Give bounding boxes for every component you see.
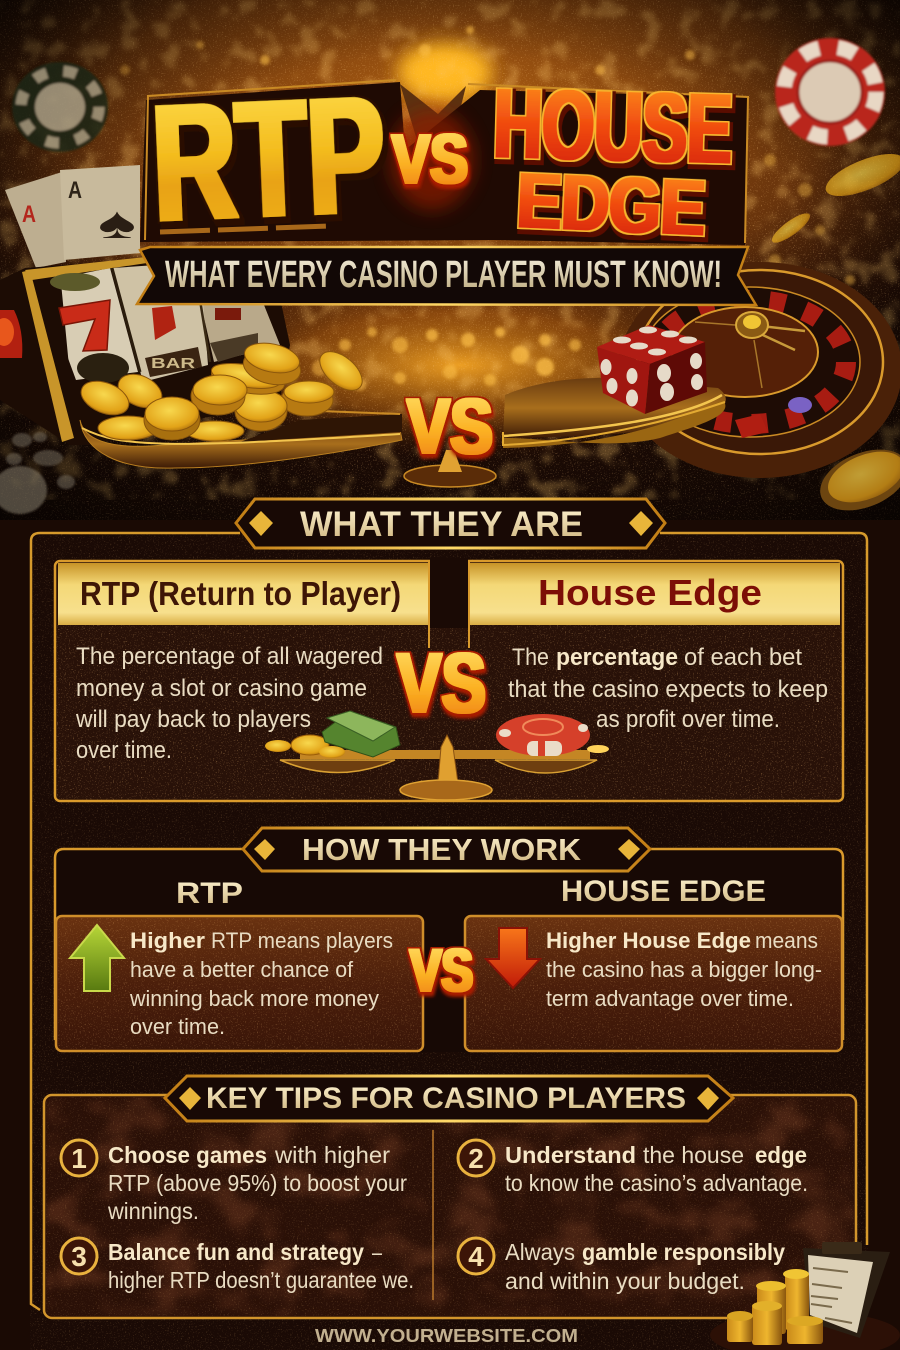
- tip 4: 4: [468, 1241, 484, 1272]
- footer url: WWW.YOURWEBSITE.COM: [315, 1326, 578, 1346]
- gold coins floating: [768, 145, 900, 522]
- panel: key tips: [44, 1095, 856, 1318]
- chip: red poker chip top right: [775, 38, 885, 146]
- House Edge box: [465, 916, 842, 1051]
- heading: how they work: [243, 828, 650, 871]
- tip 4: gamble responsibly: [582, 1239, 785, 1265]
- RTP header box: [58, 563, 428, 625]
- RTP description: over time.: [76, 737, 172, 764]
- playing cards: ♠: [98, 199, 136, 248]
- illustration: balance tray right: [503, 378, 726, 448]
- title backing plate: [140, 80, 748, 245]
- House Edge header box: [470, 563, 840, 625]
- House Edge header box: House Edge: [538, 572, 762, 613]
- icon: down arrow: [486, 928, 540, 988]
- playing cards: A: [22, 201, 36, 228]
- illustration: scale base under VS: [404, 450, 496, 487]
- tip 2: 2: [468, 1143, 484, 1174]
- RTP sub heading: RTP: [176, 877, 243, 910]
- tip 2: the house: [643, 1142, 744, 1168]
- tip 1: [61, 1140, 407, 1224]
- House Edge work text: Higher House Edge: [546, 928, 751, 953]
- RTP header box: RTP (Return to Player): [80, 575, 401, 612]
- tip 2: Understand: [505, 1142, 636, 1168]
- illustration: clipboard and coin stacks: [710, 1242, 900, 1350]
- House Edge work text: term advantage over time.: [546, 986, 794, 1011]
- tip 3: –: [372, 1239, 382, 1265]
- chip: dark poker chip top left: [12, 62, 108, 152]
- House Edge work text: [546, 928, 822, 1011]
- RTP description: The percentage of all wagered: [76, 643, 383, 670]
- House Edge description: percentage: [556, 644, 678, 671]
- heading: key tips: KEY TIPS FOR CASINO PLAYERS: [206, 1082, 686, 1115]
- RTP description: [75, 643, 383, 764]
- House Edge work text: means: [755, 928, 818, 953]
- RTP work text: over time.: [130, 1014, 225, 1039]
- panel: how they work: [55, 849, 843, 1052]
- illustration: red dice: [597, 325, 707, 414]
- title: vs: VS: [392, 120, 468, 198]
- illustration: balance scale: [265, 711, 609, 800]
- illustration: roulette wheel: [618, 262, 900, 478]
- House Edge description: that the casino expects to keep: [508, 676, 828, 703]
- House Edge description: [508, 644, 828, 733]
- chips bottom left, dim: [0, 432, 75, 514]
- tip 4: [458, 1238, 785, 1294]
- House Edge sub heading: HOUSE EDGE: [561, 875, 766, 908]
- RTP work text: winning back more money: [129, 986, 379, 1011]
- playing cards: A: [68, 177, 82, 204]
- heading: what they are: [236, 499, 665, 548]
- tip 4: and within your budget.: [505, 1268, 745, 1294]
- heading: how they work: HOW THEY WORK: [302, 832, 582, 867]
- title: EDGE: EDGE: [515, 156, 707, 252]
- tip 2: to know the casino’s advantage.: [505, 1170, 808, 1196]
- title: HOUSE: HOUSE: [492, 68, 733, 184]
- tip 2: edge: [755, 1142, 807, 1168]
- playing cards: [5, 165, 140, 268]
- House Edge work text: the casino has a bigger long-: [546, 957, 822, 982]
- tip 3: Balance fun and strategy: [108, 1239, 364, 1265]
- bokeh lights: [120, 26, 855, 391]
- panel: what they are: [55, 558, 843, 801]
- tip 1: RTP (above 95%) to boost your: [108, 1170, 407, 1196]
- RTP work text: have a better chance of: [130, 957, 354, 982]
- RTP work text: [129, 928, 393, 1039]
- illustration: balance tray left: [80, 411, 402, 468]
- tip 3: [61, 1238, 414, 1293]
- tip 1: with higher: [274, 1142, 390, 1168]
- VS badge: VS: [397, 636, 486, 730]
- tip 3: higher RTP doesn’t guarantee we.: [108, 1267, 414, 1293]
- illustration: coin pile: [76, 338, 369, 441]
- icon: up arrow: [70, 925, 124, 991]
- House Edge description: of each bet: [684, 644, 802, 671]
- illustration: slot machine: [0, 250, 290, 445]
- heading: what they are: WHAT THEY ARE: [300, 505, 583, 544]
- tip 1: winnings.: [107, 1198, 199, 1224]
- illustration: slot machine: BAR: [151, 355, 195, 372]
- House Edge description: The: [512, 644, 549, 671]
- RTP box: [56, 916, 423, 1051]
- VS badge: VS: [410, 937, 473, 1004]
- tip 2: [458, 1140, 808, 1196]
- RTP description: will pay back to players: [75, 706, 311, 733]
- House Edge description: as profit over time.: [596, 706, 780, 733]
- subtitle banner: [137, 247, 756, 305]
- tip 3: 3: [71, 1241, 87, 1272]
- VS badge large: VS: [407, 382, 493, 470]
- tip 4: Always: [505, 1239, 575, 1265]
- outer frame: content panel: [30, 532, 868, 1350]
- RTP work text: Higher: [130, 928, 205, 953]
- heading: key tips: [165, 1076, 733, 1121]
- tip 1: 1: [71, 1143, 87, 1174]
- RTP work text: RTP means players: [211, 928, 393, 953]
- RTP description: money a slot or casino game: [76, 675, 367, 702]
- tip 1: Choose games: [108, 1142, 267, 1168]
- title: RTP: RTP: [149, 62, 388, 257]
